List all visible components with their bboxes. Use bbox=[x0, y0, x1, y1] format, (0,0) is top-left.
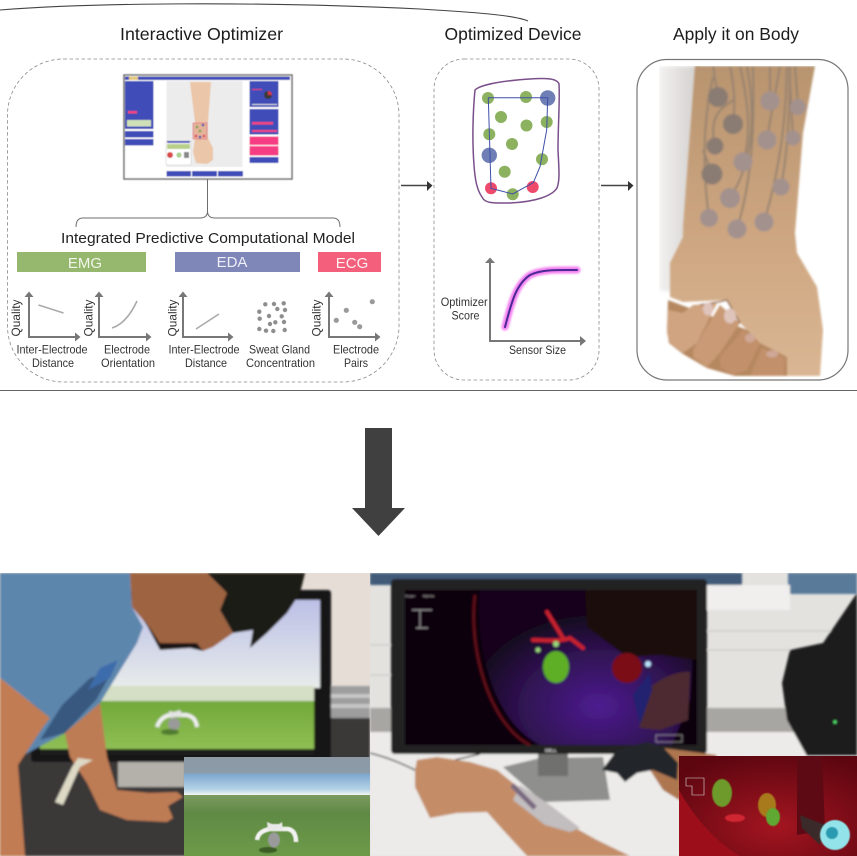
bar: EMG: EMG bbox=[68, 255, 102, 272]
wall and table bbox=[370, 708, 857, 732]
face bbox=[130, 573, 233, 651]
optimizer score chart bbox=[441, 258, 586, 357]
title: Interactive Optimizer: Interactive Optimizer bbox=[120, 24, 283, 44]
optimizer software screenshot bbox=[124, 75, 292, 179]
monitor bbox=[31, 590, 331, 762]
arrow: device to body bbox=[601, 181, 634, 191]
panel: interactive optimizer bbox=[8, 59, 399, 382]
axis captions: Electrode bbox=[333, 342, 379, 356]
title: Optimized Device: Optimized Device bbox=[444, 24, 582, 44]
bar: ECG bbox=[318, 252, 381, 272]
shirt bbox=[0, 573, 143, 757]
printed traces bbox=[703, 66, 798, 229]
panel: optimized device bbox=[434, 59, 599, 380]
shelf and carpet bbox=[325, 686, 370, 718]
heading: integrated model: Integrated Predictive Computational Model bbox=[61, 230, 355, 247]
title: Apply it on Body: Apply it on Body bbox=[673, 24, 799, 44]
optimizer score chart: Optimizer bbox=[441, 295, 488, 309]
brace connector bbox=[76, 179, 340, 227]
photo: push-up exercise bbox=[0, 573, 370, 856]
axis captions: Distance bbox=[185, 356, 227, 370]
monitor bbox=[391, 579, 707, 754]
axis captions: Electrode bbox=[104, 342, 150, 356]
axis captions: Pairs bbox=[344, 356, 368, 370]
axis captions: Sweat Gland bbox=[249, 342, 310, 356]
chart: EMG distance bbox=[9, 292, 80, 342]
device layout bbox=[473, 79, 559, 203]
photo: VR game bbox=[370, 573, 857, 856]
finger base bbox=[667, 300, 787, 376]
chart: EMG orientation bbox=[82, 292, 152, 342]
controller bbox=[602, 742, 678, 782]
sensor cable bbox=[370, 753, 480, 770]
chart: ECG pairs bbox=[310, 292, 380, 342]
chart: sweat gland dots bbox=[257, 301, 287, 333]
optimizer score chart: Sensor Size bbox=[509, 343, 566, 357]
chart: EDA distance bbox=[166, 292, 234, 342]
game creature bbox=[533, 612, 583, 683]
hair bbox=[207, 573, 305, 648]
left arm bbox=[0, 678, 50, 856]
forearm and hand bbox=[670, 66, 823, 376]
top arc line bbox=[0, 4, 528, 21]
inset: VR game view bbox=[679, 756, 857, 856]
axis captions: Concentration bbox=[246, 356, 315, 370]
chart: ECG pairs: Quality bbox=[310, 300, 324, 336]
divider line bbox=[0, 390, 857, 391]
chart: EMG orientation: Quality bbox=[82, 300, 96, 336]
optimizer score chart: Score bbox=[452, 308, 480, 322]
right arm and hand bbox=[65, 703, 183, 822]
photo: VR game: DELL bbox=[545, 748, 557, 753]
headset bbox=[782, 593, 857, 756]
axis captions: Inter-Electrode bbox=[168, 342, 240, 356]
monitor stand bbox=[118, 762, 185, 787]
bar: ECG: ECG bbox=[336, 255, 368, 272]
window strip bbox=[370, 573, 742, 585]
axis captions bbox=[16, 342, 379, 370]
game map overlay bbox=[405, 594, 435, 628]
big down arrow bbox=[352, 428, 405, 536]
fingers bbox=[667, 303, 717, 353]
bar: EMG bbox=[17, 252, 146, 272]
arrow: optimizer to device bbox=[401, 181, 432, 191]
bar: EDA bbox=[175, 252, 300, 272]
chart: EDA distance: Quality bbox=[166, 300, 180, 336]
axis captions: Orientation bbox=[101, 356, 155, 370]
photo: tattoo electrodes on arm bbox=[659, 66, 824, 377]
axis captions: Distance bbox=[32, 356, 74, 370]
game map overlay: Machine bbox=[423, 594, 435, 598]
hand holding controller bbox=[650, 748, 717, 800]
inset: game view bbox=[184, 757, 370, 856]
game map overlay: Oxygen bbox=[405, 594, 416, 598]
chart: EMG distance: Quality bbox=[9, 300, 23, 336]
sensor strap bbox=[55, 758, 93, 805]
monitor stand bbox=[503, 757, 610, 802]
user arm bbox=[415, 757, 630, 856]
bar: EDA: EDA bbox=[217, 254, 247, 271]
avatar bbox=[157, 710, 197, 735]
electrodes bbox=[702, 87, 743, 184]
panel: wrist photo bbox=[637, 60, 848, 380]
axis captions: Inter-Electrode bbox=[16, 342, 88, 356]
